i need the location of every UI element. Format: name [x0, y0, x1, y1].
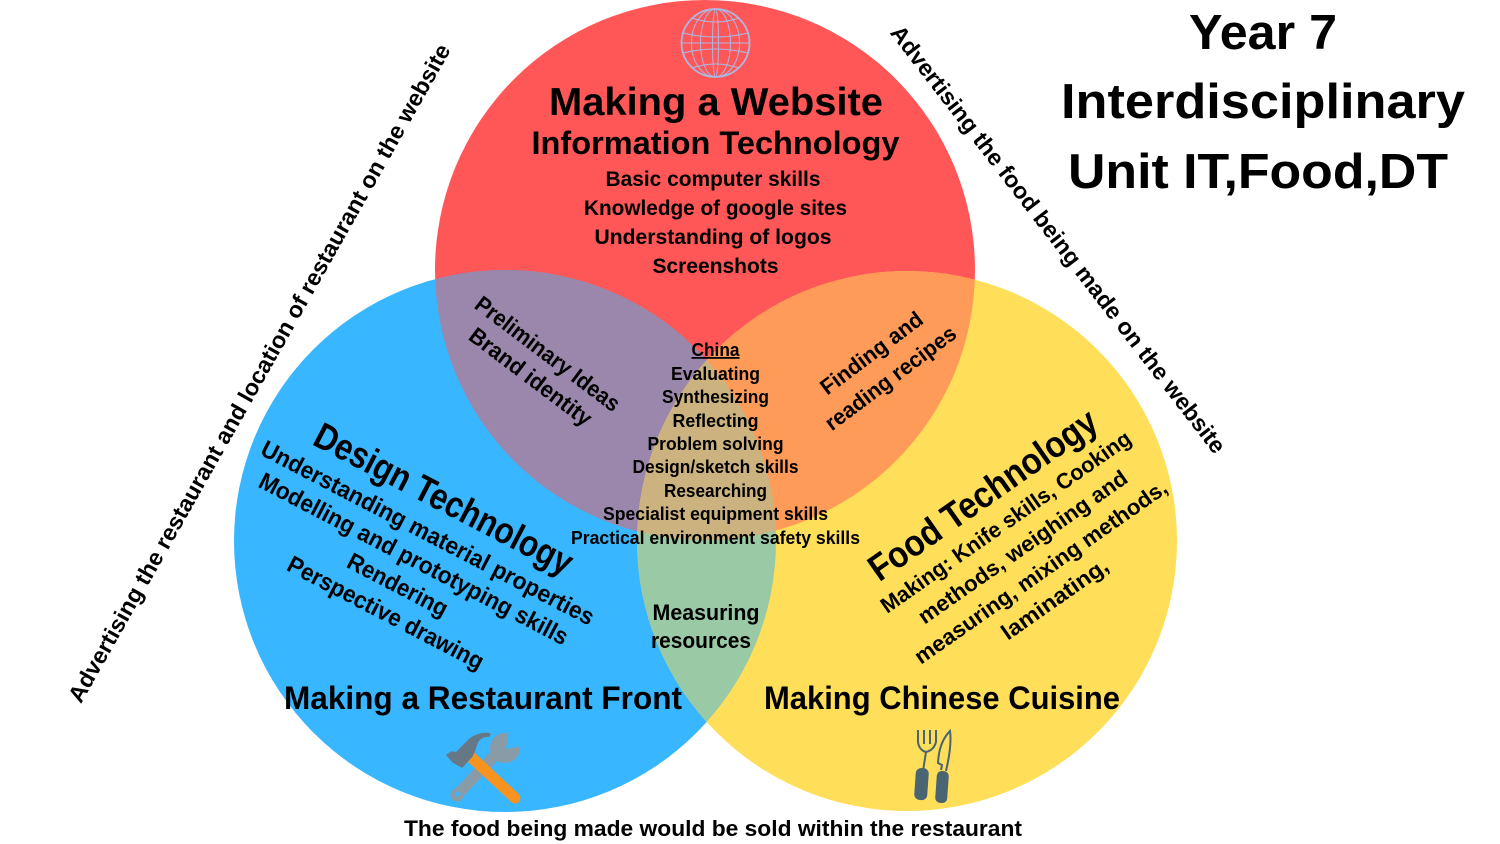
icon: globe	[682, 9, 750, 77]
panel text: Making a Website: Basic computer skills	[606, 168, 820, 191]
icon: hammer and wrench	[447, 729, 525, 802]
overlap text: preliminary ideas and brand identity: Preliminary Ideas	[470, 291, 626, 417]
overlap text: preliminary ideas and brand identity: Brand identity	[464, 322, 597, 431]
centre text: shared skills: Reflecting	[672, 411, 758, 431]
panel text: Design Technology: Modelling and prototyping skills	[254, 468, 573, 651]
overlap text: finding and reading recipes: reading recipes	[820, 320, 961, 436]
heading: Making Chinese Cuisine: Making Chinese Cuisine	[764, 680, 1120, 716]
centre text: shared skills: Specialist equipment skills	[603, 504, 828, 524]
centre text: shared skills: Synthesizing	[662, 387, 769, 407]
overlap: red and yellow	[637, 271, 975, 532]
centre text: shared skills: Researching	[664, 481, 767, 501]
panel text: Food Technology: Food Technology	[860, 400, 1105, 589]
panel text: Making a Website	[532, 81, 900, 278]
panel text: Making a Website: Information Technology	[532, 125, 900, 161]
overlap: centre	[637, 360, 776, 540]
venn diagram	[234, 0, 1177, 812]
overlap text: measuring resources: Measuring	[652, 600, 760, 625]
caption: The food being made would be sold within the restaurant	[404, 816, 1023, 841]
panel text: Design Technology: Perspective drawing	[283, 551, 488, 676]
panel text: Making a Website: Making a Website	[549, 81, 883, 124]
overlap text: measuring resources	[651, 600, 760, 653]
overlap text: finding and reading recipes: Finding and	[815, 306, 928, 400]
centre text: shared skills: China	[692, 340, 740, 360]
panel text: Food Technology	[860, 400, 1172, 669]
panel text: Food Technology: measuring, mixing methods,	[909, 475, 1172, 669]
overlap: blue and yellow	[637, 360, 776, 722]
title: Year 7	[1189, 6, 1337, 60]
side label: food on website: Advertising the food being made on the website	[885, 20, 1231, 458]
panel text: Making a Website: Understanding of logos	[594, 226, 832, 249]
title: Unit IT,Food,DT	[1068, 145, 1448, 199]
circle: Food Technology	[637, 271, 1177, 811]
centre text: shared skills: Problem solving	[648, 434, 784, 454]
panel text: Design Technology: Rendering	[342, 548, 452, 623]
circle: Design Technology	[234, 270, 776, 812]
panel text: Design Technology: Understanding material properties	[256, 435, 599, 631]
panel text: Food Technology: methods, weighing and	[913, 465, 1132, 629]
panel text: Design Technology: Design Technology	[307, 415, 580, 583]
panel text: Food Technology: laminating,	[996, 553, 1113, 645]
panel text: Making a Website: Screenshots	[652, 255, 778, 278]
centre text: shared skills: Evaluating	[671, 364, 760, 384]
overlap: red and blue	[435, 270, 706, 532]
icon: fork and knife	[914, 730, 950, 803]
centre text: shared skills: Practical environment safety skills	[571, 528, 860, 548]
centre text: shared skills: Design/sketch skills	[632, 457, 798, 477]
centre text: shared skills	[571, 340, 860, 548]
panel text: Food Technology: Making: Knife skills, Cooking	[876, 426, 1136, 618]
heading: Making a Restaurant Front: Making a Restaurant Front	[284, 680, 682, 716]
circle: Making a Website	[435, 0, 975, 540]
title	[1061, 6, 1465, 199]
overlap text: measuring resources: resources	[651, 628, 751, 653]
panel text: Making a Website: Knowledge of google sites	[584, 197, 847, 220]
side label: restaurant on website: Advertising the restaurant and location of restaurant on the website	[63, 39, 456, 707]
title: Interdisciplinary	[1061, 75, 1465, 129]
